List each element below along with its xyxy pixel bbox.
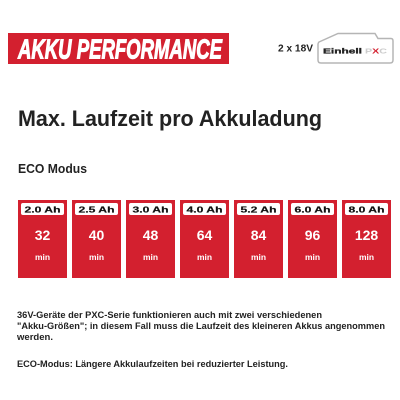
card: 2.0 Ah: 2.0 Ah bbox=[24, 204, 60, 214]
card: 2.5 Ah: 40 bbox=[89, 227, 104, 243]
text block: 36V note bbox=[16, 310, 385, 343]
icon: Einhell PXC battery logo: P X C bbox=[365, 46, 388, 56]
card: 4.0 Ah: 64 bbox=[197, 227, 212, 243]
card: 8.0 Ah: min bbox=[359, 252, 374, 262]
card: 5.2 Ah bbox=[234, 200, 283, 278]
card: 6.0 Ah: min bbox=[305, 252, 320, 262]
text block: ECO-Modus note: ECO-Modus: Längere Akkulaufzeiten bei reduzierter Leistung. bbox=[17, 359, 288, 370]
voltage label: 2 x 18V bbox=[278, 42, 313, 54]
card: 2.0 Ah: min bbox=[35, 252, 50, 262]
banner: Akku Performance: AKKU PERFORMANCE bbox=[17, 34, 223, 64]
card: 6.0 Ah: 96 bbox=[305, 227, 320, 243]
runtime cards bbox=[18, 200, 391, 278]
card: 8.0 Ah: 8.0 Ah bbox=[348, 204, 384, 214]
card: 8.0 Ah: 128 bbox=[355, 227, 378, 243]
card: 2.0 Ah bbox=[18, 200, 67, 278]
card: 2.5 Ah bbox=[72, 200, 121, 278]
text block: 36V note: werden. bbox=[16, 332, 53, 343]
card: 3.0 Ah: min bbox=[143, 252, 158, 262]
card: 8.0 Ah bbox=[342, 200, 391, 278]
icon: Einhell PXC battery logo bbox=[318, 34, 393, 63]
card: 5.2 Ah: 84 bbox=[251, 227, 266, 243]
subheading: ECO Modus: ECO Modus bbox=[18, 161, 87, 176]
title: Max. Laufzeit pro Akkuladung bbox=[18, 106, 322, 131]
card: 4.0 Ah: min bbox=[197, 252, 212, 262]
card: 4.0 Ah bbox=[180, 200, 229, 278]
text block: 36V note: "Akku-Größen"; in diesem Fall muss die Laufzeit des kleineren Akkus angenommen bbox=[17, 321, 385, 332]
card: 5.2 Ah: min bbox=[251, 252, 266, 262]
card: 3.0 Ah bbox=[126, 200, 175, 278]
card: 2.5 Ah: 2.5 Ah bbox=[78, 204, 114, 214]
card: 2.5 Ah: min bbox=[89, 252, 104, 262]
card: 3.0 Ah: 48 bbox=[143, 227, 158, 243]
card: 6.0 Ah: 6.0 Ah bbox=[294, 204, 330, 214]
card: 5.2 Ah: 5.2 Ah bbox=[240, 204, 276, 214]
banner: Akku Performance bbox=[8, 33, 229, 64]
card: 4.0 Ah: 4.0 Ah bbox=[186, 204, 222, 214]
card: 3.0 Ah: 3.0 Ah bbox=[132, 204, 168, 214]
card: 6.0 Ah bbox=[288, 200, 337, 278]
card: 2.0 Ah: 32 bbox=[35, 227, 50, 243]
icon: Einhell PXC battery logo: Einhell bbox=[323, 46, 362, 56]
text block: 36V note: 36V-Geräte der PXC-Serie funktionieren auch mit zwei verschiedenen bbox=[17, 310, 322, 321]
